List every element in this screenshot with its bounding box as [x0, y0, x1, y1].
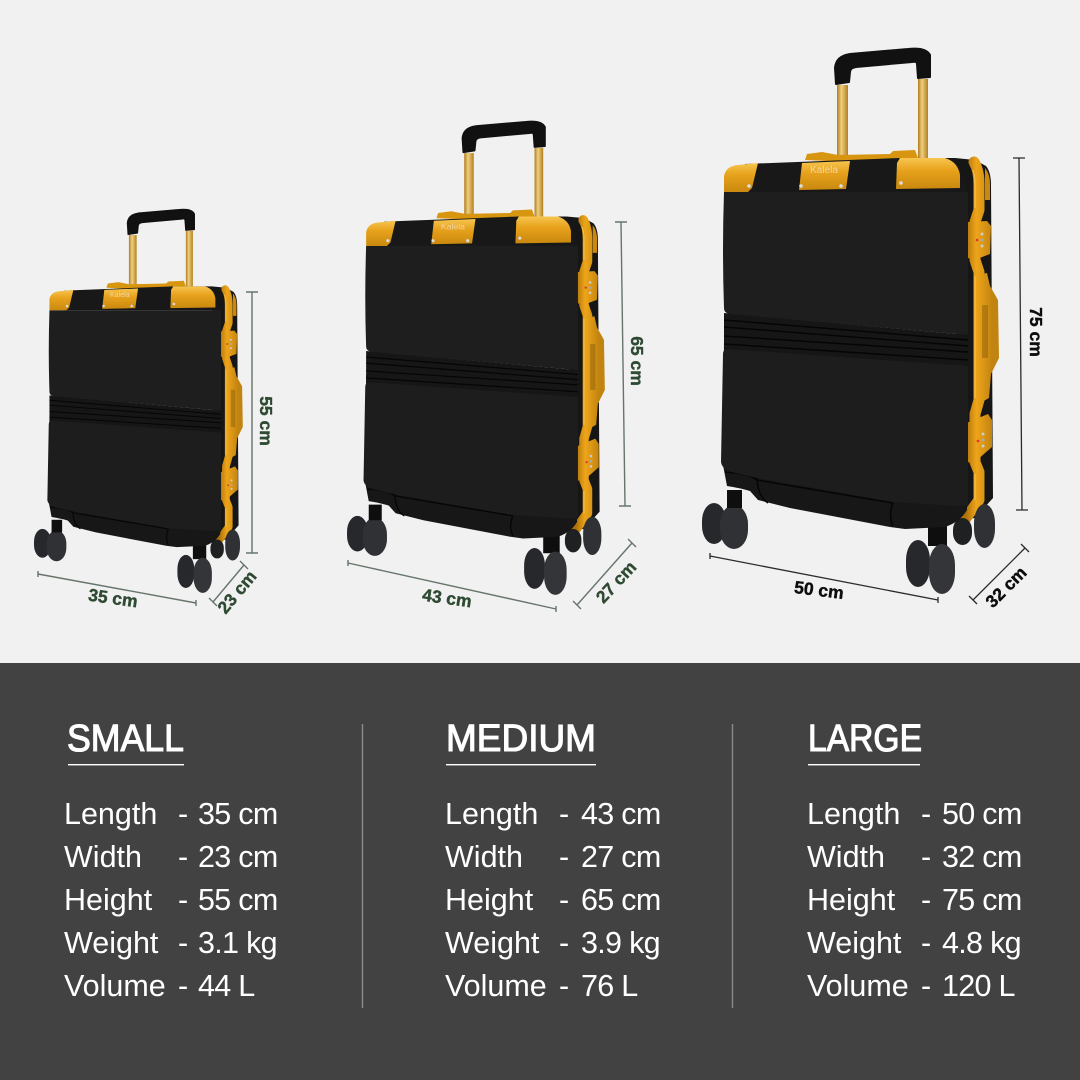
- column: large: 120 L: [942, 969, 1015, 1003]
- dimensions: large: 32 cm: [981, 562, 1031, 612]
- column: medium: 76 L: [581, 969, 638, 1003]
- column: medium: Volume: [445, 969, 547, 1003]
- column: large: -: [921, 883, 931, 917]
- suitcase: large: [702, 49, 999, 594]
- column: small: 35 cm: [198, 797, 278, 831]
- column: small: -: [178, 926, 188, 960]
- column: large: Height: [807, 883, 896, 917]
- column: large: 75 cm: [942, 883, 1022, 917]
- column: small: Volume: [64, 969, 166, 1003]
- column: medium: 43 cm: [581, 797, 661, 831]
- dimensions: medium: [348, 222, 647, 612]
- column: small: 23 cm: [198, 840, 278, 874]
- column: small: Weight: [64, 926, 159, 960]
- suitcase: small: Kalela: [110, 292, 130, 299]
- column: medium: Length: [445, 797, 538, 831]
- column: small: -: [178, 840, 188, 874]
- column: medium: 65 cm: [581, 883, 661, 917]
- dimensions: large: 50 cm: [793, 577, 845, 603]
- dimensions: medium: 65 cm: [627, 336, 647, 386]
- column: small: -: [178, 797, 188, 831]
- column: small: -: [178, 883, 188, 917]
- dimensions: medium: 27 cm: [592, 557, 640, 607]
- column: large: 32 cm: [942, 840, 1022, 874]
- column: medium: [445, 718, 661, 1003]
- column: large: Width: [807, 840, 885, 874]
- suitcase: large: Kalela: [810, 165, 838, 176]
- suitcase: small: [34, 209, 243, 593]
- suitcase: medium: Kalela: [441, 221, 465, 231]
- column: medium: Weight: [445, 926, 540, 960]
- dimensions: small: 55 cm: [256, 396, 276, 446]
- column: medium: -: [559, 883, 569, 917]
- dimensions: small: [38, 292, 276, 617]
- column: medium: -: [559, 797, 569, 831]
- column: small: 3.1 kg: [198, 926, 277, 960]
- column: medium: 27 cm: [581, 840, 661, 874]
- column: large: LARGE: [808, 718, 922, 760]
- column: large: -: [921, 840, 931, 874]
- column: large: 4.8 kg: [942, 926, 1021, 960]
- column: large: Weight: [807, 926, 902, 960]
- column: small: Width: [64, 840, 142, 874]
- dimensions: large: 75 cm: [1026, 307, 1046, 357]
- suitcase: medium: [347, 121, 605, 595]
- column: medium: -: [559, 969, 569, 1003]
- column: medium: -: [559, 926, 569, 960]
- column: medium: Width: [445, 840, 523, 874]
- column: small: SMALL: [67, 718, 184, 760]
- column: small: 44 L: [198, 969, 255, 1003]
- column: medium: Height: [445, 883, 534, 917]
- column: medium: -: [559, 840, 569, 874]
- dimensions: small: 23 cm: [213, 567, 261, 617]
- column: large: [807, 718, 1022, 1003]
- column: large: -: [921, 797, 931, 831]
- column: large: Length: [807, 797, 900, 831]
- column: medium: 3.9 kg: [581, 926, 660, 960]
- column: large: -: [921, 926, 931, 960]
- dimensions: large: [710, 158, 1046, 612]
- column: small: Length: [64, 797, 157, 831]
- column: small: -: [178, 969, 188, 1003]
- column: large: Volume: [807, 969, 909, 1003]
- column: medium: MEDIUM: [446, 718, 596, 760]
- column: small: [64, 718, 278, 1003]
- column: large: -: [921, 969, 931, 1003]
- column: small: Height: [64, 883, 153, 917]
- dimensions: small: 35 cm: [87, 585, 139, 611]
- column: small: 55 cm: [198, 883, 278, 917]
- dimensions: medium: 43 cm: [421, 585, 473, 611]
- panel: specifications: [0, 663, 1080, 1080]
- column: large: 50 cm: [942, 797, 1022, 831]
